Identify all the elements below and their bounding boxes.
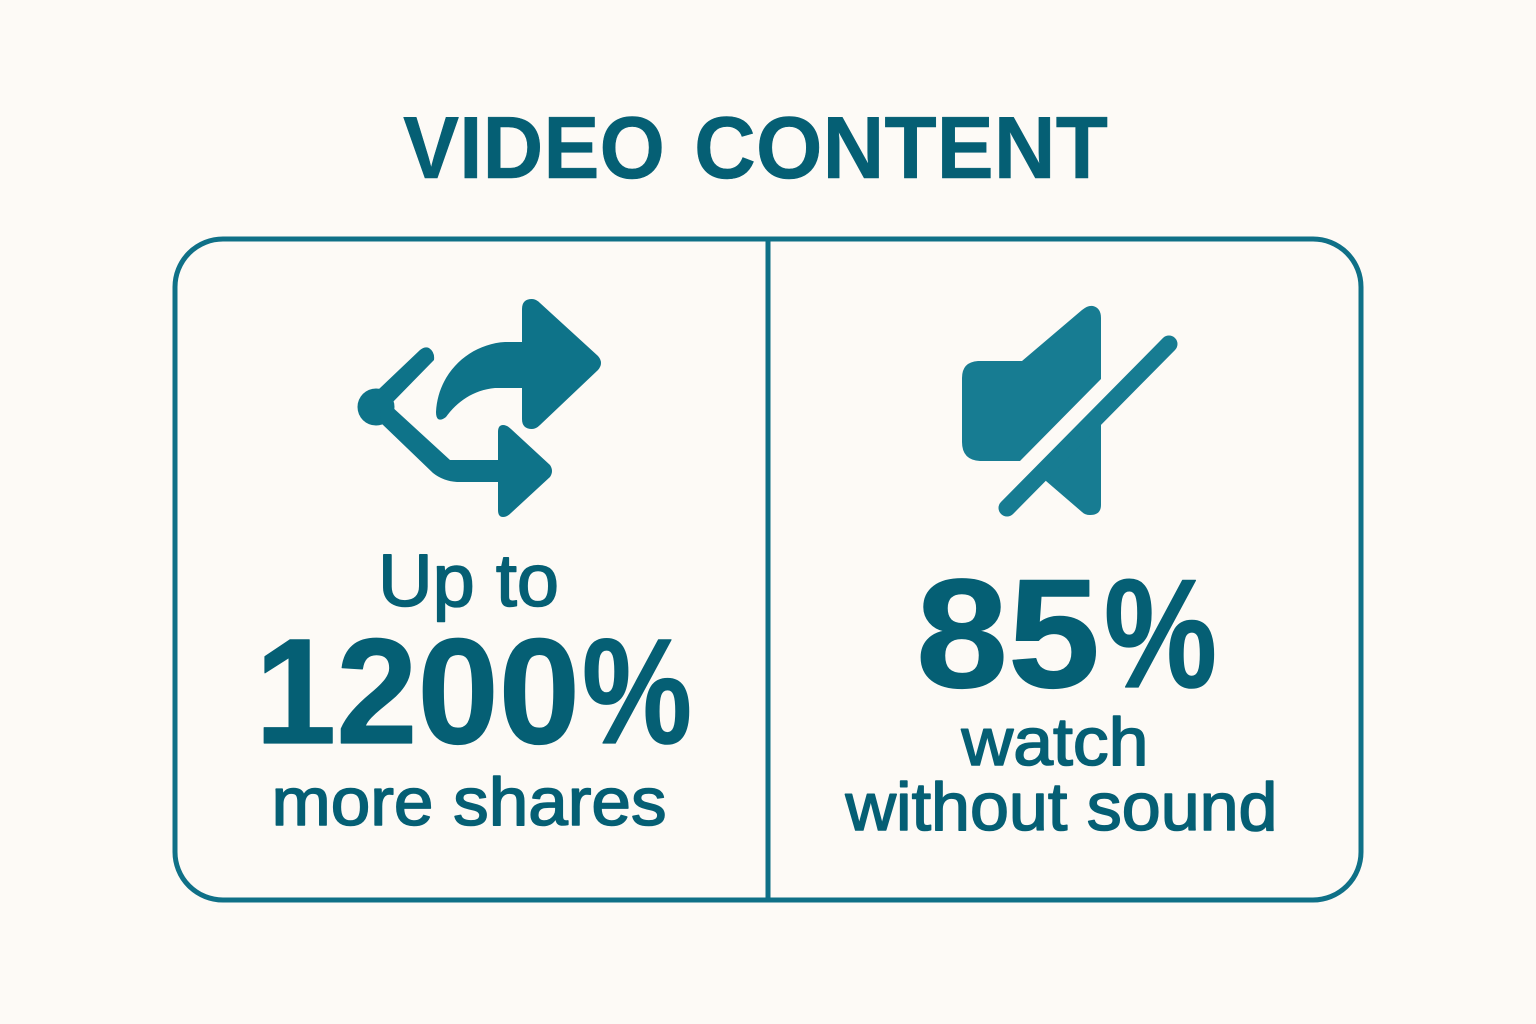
panel: stats frame (175, 239, 1361, 900)
icon: muted speaker (962, 306, 1169, 515)
stat: 85%: 85 (916, 547, 1100, 720)
title (403, 98, 1108, 197)
stat: 85% (916, 547, 1217, 720)
panel: muted viewing (844, 306, 1278, 845)
text: without sound: without sound (844, 769, 1278, 845)
text: up to: Up to (378, 539, 559, 622)
stat: 85%: % (1104, 547, 1217, 720)
title: CONTENT (694, 98, 1108, 197)
title: VIDEO (403, 98, 665, 197)
icon: share arrows (358, 299, 601, 517)
stat: 1200%: % (582, 607, 692, 775)
panel: shares (255, 299, 692, 840)
text: more shares: more shares (272, 764, 666, 840)
stat: 1200%: 1200 (255, 607, 580, 775)
text: watch: watch (960, 704, 1148, 780)
